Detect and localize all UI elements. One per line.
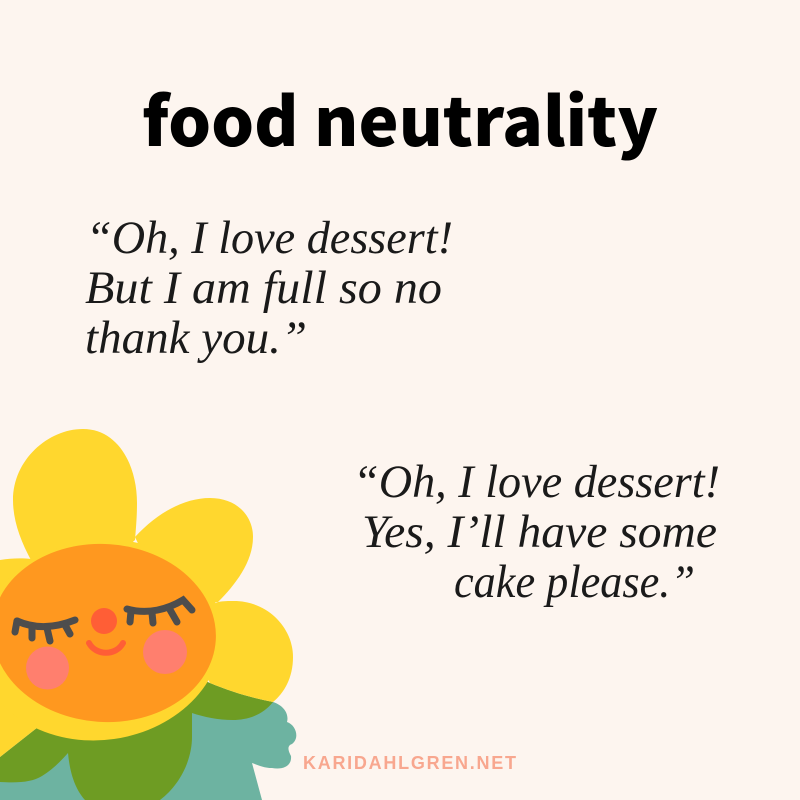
collar under the face (0, 524, 235, 756)
body (0, 700, 296, 800)
title: food neutrality (142, 69, 658, 166)
yellow petals (0, 429, 293, 757)
quote: declining dessert: But I am full so no (85, 262, 442, 314)
quote: accepting cake: cake please.” (454, 556, 695, 608)
nose (91, 608, 117, 634)
orange face (0, 536, 222, 730)
quote: declining dessert (85, 212, 453, 364)
cheeks (26, 630, 187, 690)
flower character (0, 429, 296, 800)
green leaves (0, 670, 273, 800)
quote: declining dessert: thank you.” (85, 312, 307, 364)
eyes (15, 600, 192, 641)
quote: accepting cake: “Oh, I love dessert! (353, 456, 720, 508)
quote: accepting cake (353, 456, 720, 608)
website credit: KARIDAHLGREN.NET (303, 753, 516, 773)
quote: accepting cake: Yes, I’ll have some (362, 506, 717, 558)
smile (89, 643, 123, 653)
quote: declining dessert: “Oh, I love dessert! (86, 212, 453, 264)
